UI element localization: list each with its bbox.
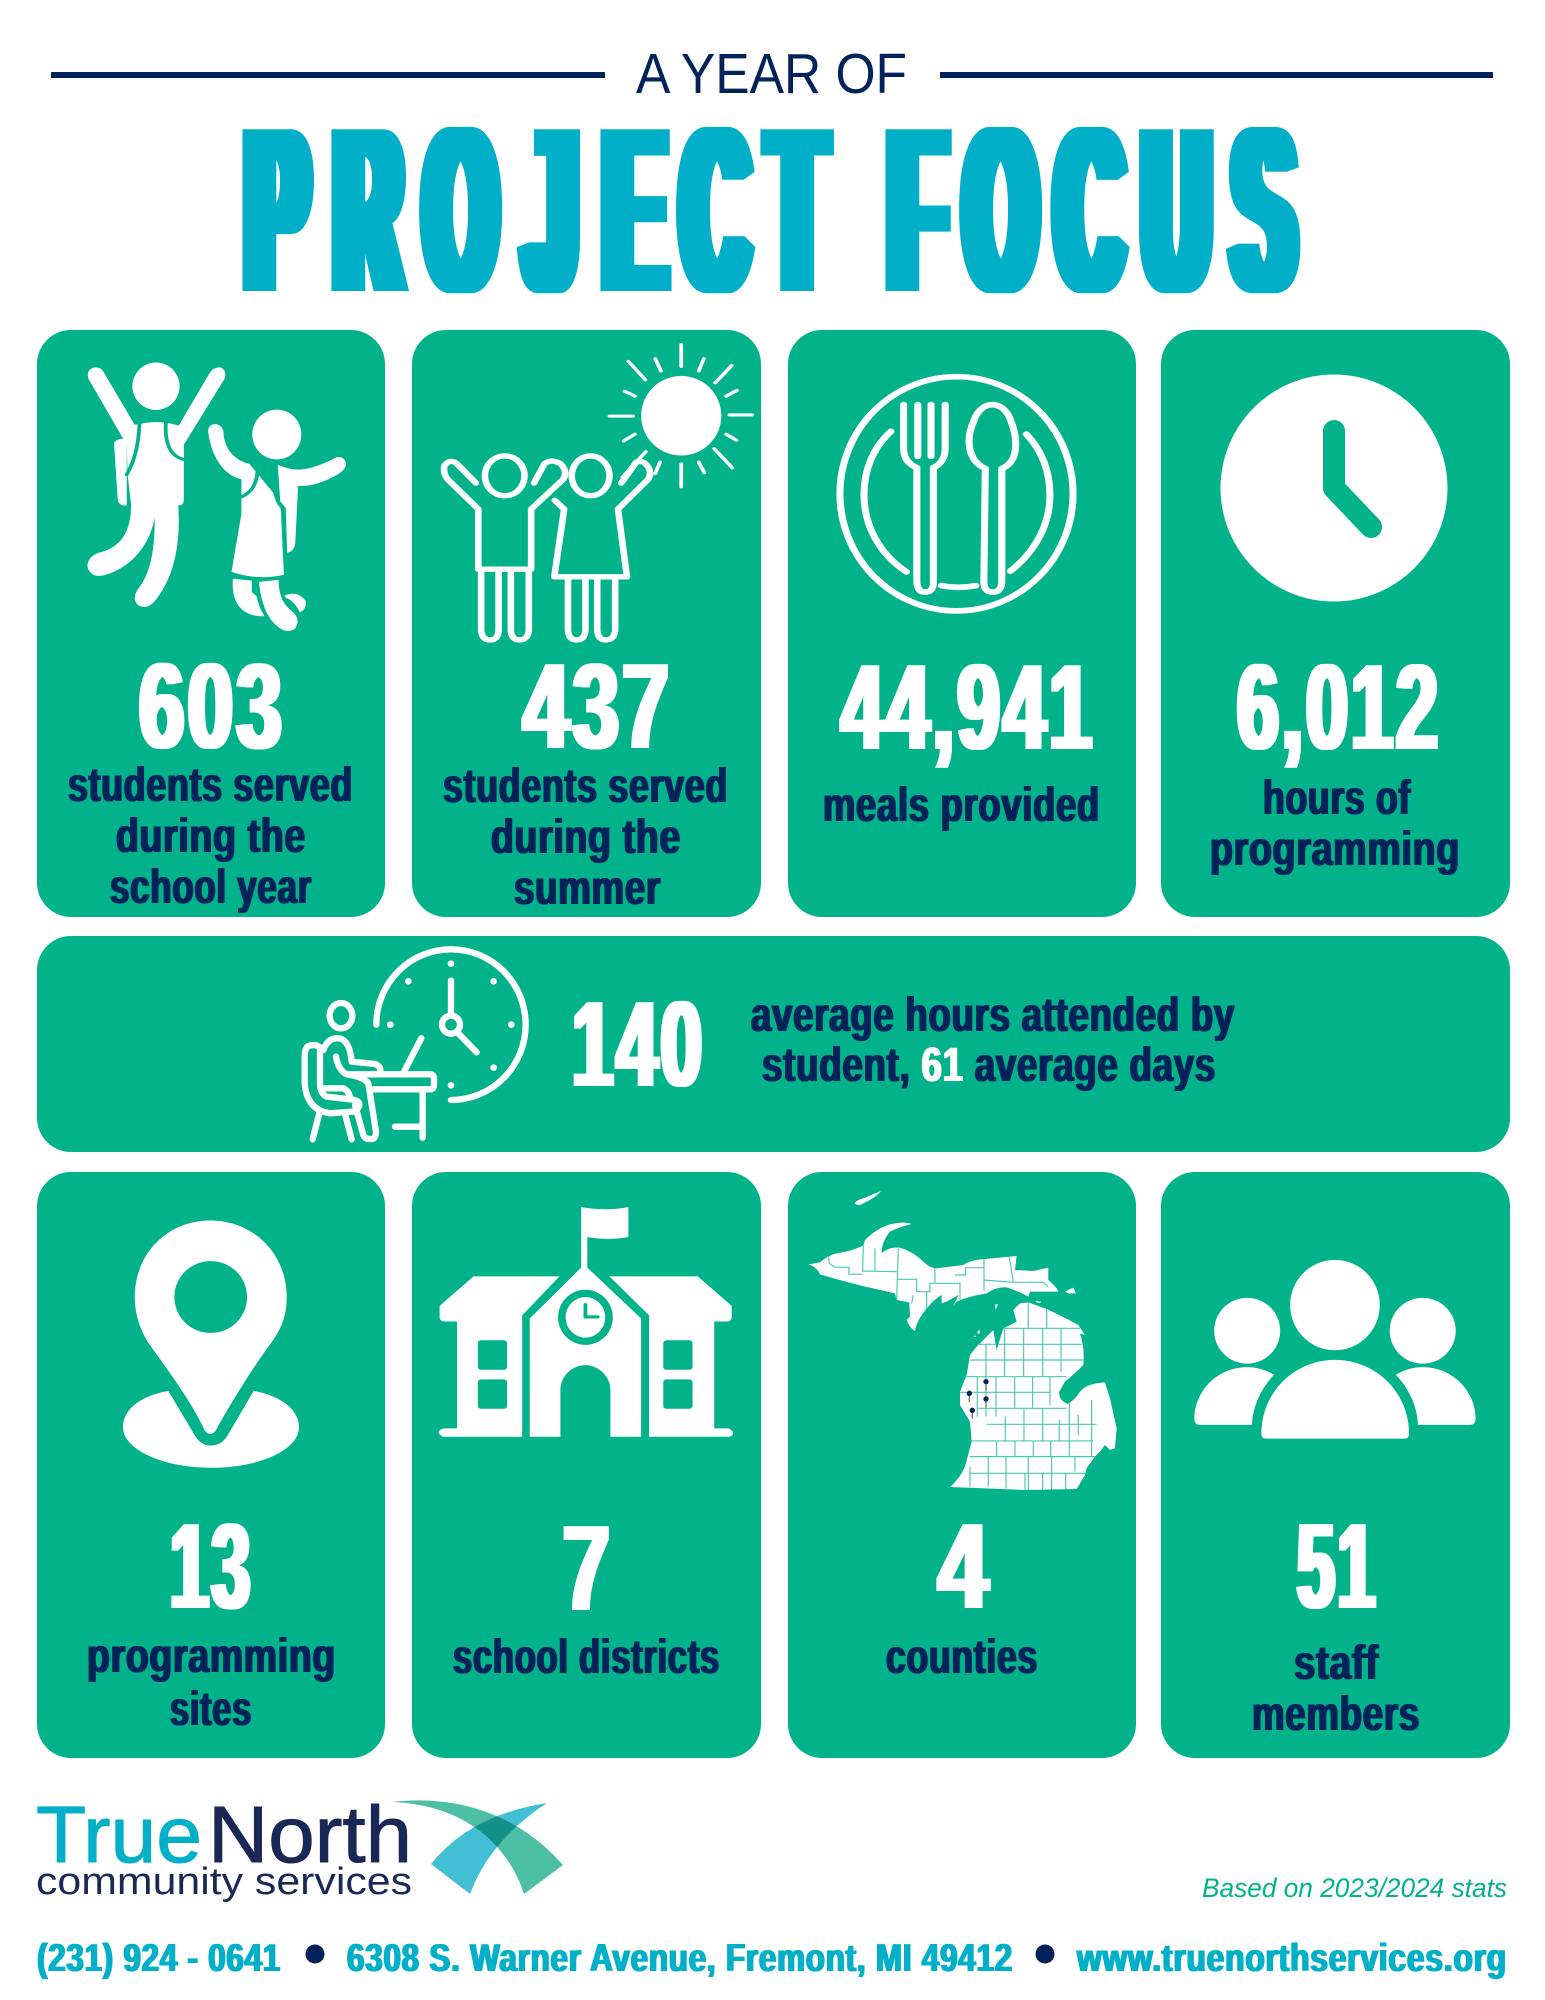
label: staff members: staff xyxy=(1294,1637,1379,1690)
panel: students during summer xyxy=(412,330,761,917)
panel: hours of programming xyxy=(1161,330,1510,917)
label: students served during the summer xyxy=(443,760,728,915)
footer: contact details: (231) 924 - 0641 xyxy=(37,1937,281,1980)
panel: students during school year xyxy=(37,330,385,917)
label: staff members: members xyxy=(1252,1688,1420,1741)
label: average hours and days xyxy=(751,989,1235,1092)
label: counties: counties xyxy=(886,1631,1038,1684)
label: students served during the school year: during the xyxy=(116,810,306,863)
panel: meals provided xyxy=(788,330,1136,917)
icon: jumping students xyxy=(88,363,346,631)
icon: location pin xyxy=(123,1221,299,1468)
label: hours of programming xyxy=(1210,772,1460,876)
logo: truenorth community services xyxy=(36,1790,563,1903)
icon: michigan map with pins xyxy=(808,1191,1117,1490)
number: 603: 603 xyxy=(139,638,285,774)
header: a year of: A YEAR OF xyxy=(636,42,907,106)
title: project focus: PROJECT FOCUS xyxy=(247,78,1293,341)
icon: three people xyxy=(1194,1260,1476,1439)
label: programming sites: sites xyxy=(170,1683,252,1736)
label: school districts: school districts xyxy=(453,1631,720,1684)
number: 44,941: 44,941 xyxy=(841,639,1095,775)
panel: staff members xyxy=(1161,1172,1510,1758)
label: meals provided: meals provided xyxy=(823,779,1100,832)
number: 13: 13 xyxy=(170,1498,253,1634)
label: average hours and days: average hours attended by xyxy=(751,989,1235,1042)
logo: truenorth community services: True xyxy=(36,1790,202,1879)
label: programming sites: programming xyxy=(87,1630,336,1683)
label: hours of programming: hours of xyxy=(1263,772,1411,825)
note: based on stats: Based on 2023/2024 stats xyxy=(1202,1873,1507,1903)
number: 51: 51 xyxy=(1297,1498,1378,1634)
icon: children and sun xyxy=(444,345,752,640)
label: students served during the summer: summer xyxy=(514,862,661,915)
footer: contact details xyxy=(37,1937,1507,1980)
footer: contact details: 6308 S. Warner Avenue, Fremont, MI 49412 xyxy=(347,1937,1013,1980)
panel: school districts xyxy=(412,1172,761,1758)
logo: truenorth community services: community services xyxy=(36,1861,412,1903)
label: students served during the summer: students served xyxy=(443,760,728,813)
icon: plate fork and spoon xyxy=(840,377,1073,611)
icon: school building xyxy=(439,1207,733,1437)
icon: student at desk with clock xyxy=(305,949,526,1139)
number: 7: 7 xyxy=(563,1500,613,1636)
number: 140: 140 xyxy=(572,976,705,1112)
label: staff members xyxy=(1252,1637,1420,1741)
panel: counties xyxy=(788,1172,1136,1758)
label: students served during the school year: school year xyxy=(110,861,312,914)
label: hours of programming: programming xyxy=(1210,823,1460,876)
icon: clock xyxy=(1220,374,1448,602)
header: a year of xyxy=(51,42,1493,106)
number: 437: 437 xyxy=(523,638,672,774)
label: students served during the school year: students served xyxy=(68,759,353,812)
label: students served during the school year xyxy=(68,759,353,914)
panel: programming sites xyxy=(37,1172,385,1758)
panel: average hours attended xyxy=(37,936,1510,1152)
label: average hours and days: student, 61 average days xyxy=(762,1039,1216,1092)
logo: truenorth community services: North xyxy=(208,1790,412,1879)
number: 4: 4 xyxy=(938,1498,992,1634)
label: students served during the summer: during the xyxy=(491,811,681,864)
label: programming sites xyxy=(87,1630,336,1736)
